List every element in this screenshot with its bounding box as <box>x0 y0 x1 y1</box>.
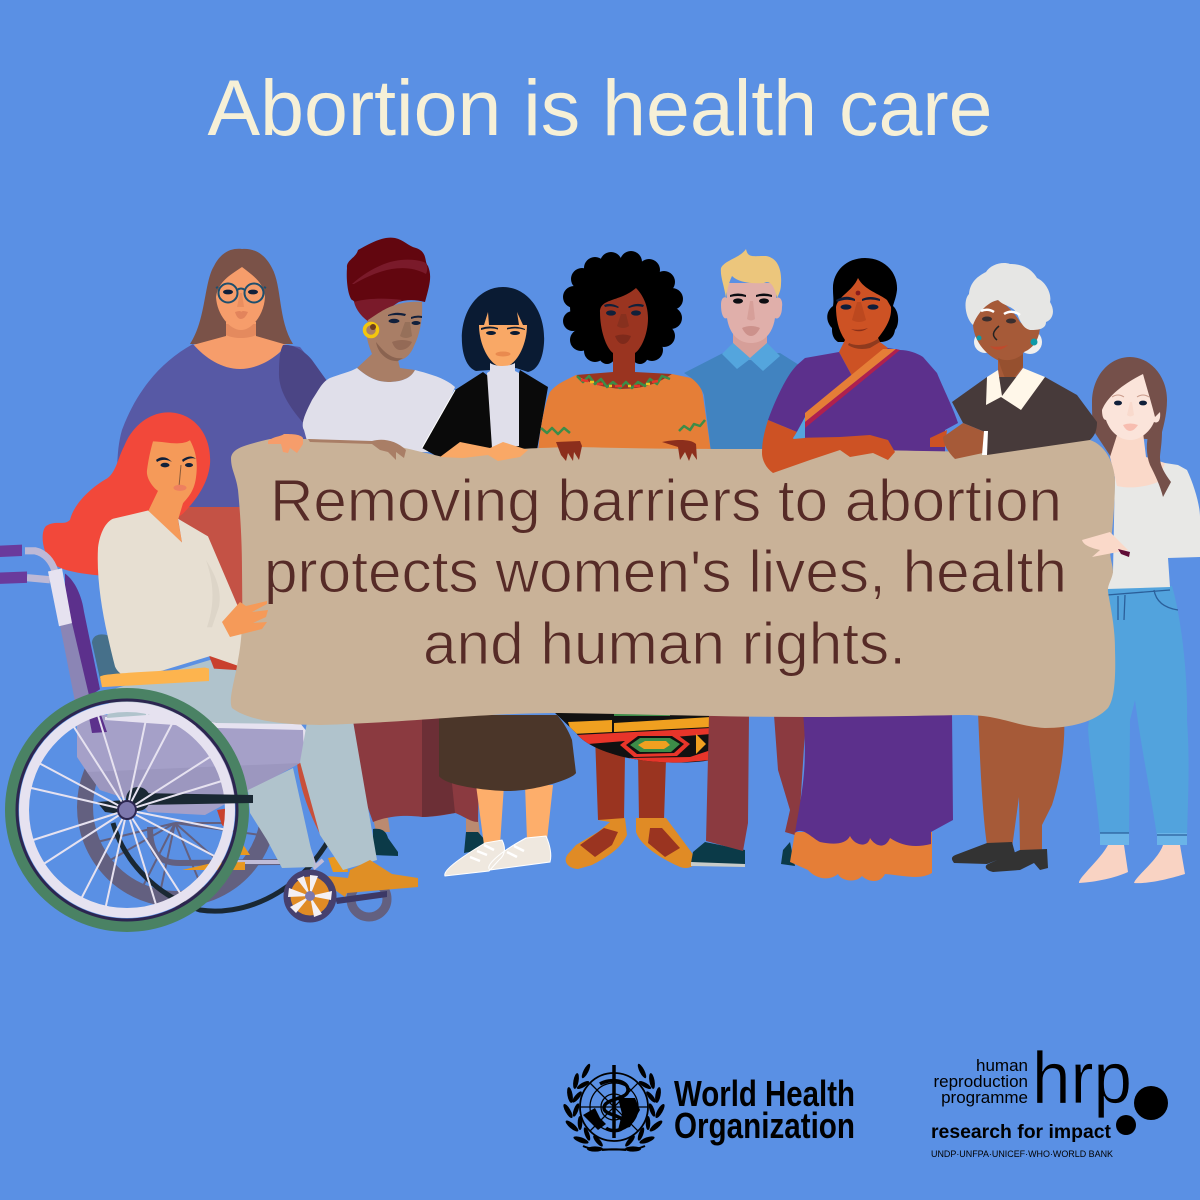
eyebrows and eyes <box>156 457 196 467</box>
person: young woman on the right <box>1079 357 1200 883</box>
blue shirt <box>684 353 799 452</box>
person: woman with glasses, purple sweater <box>117 249 327 617</box>
neck and chest <box>1110 432 1165 487</box>
wheelchair user figure and chair <box>0 412 418 926</box>
earring <box>364 324 378 336</box>
banner text: Removing barriers to abortion <box>270 468 1062 534</box>
lower body: elderly woman's legs and shoes <box>952 712 1064 872</box>
laces <box>470 845 524 861</box>
emblem <box>562 1063 666 1152</box>
brows <box>1112 395 1149 397</box>
laurel right <box>624 1063 666 1152</box>
neck and chest <box>193 322 287 372</box>
bare ankles <box>373 818 480 834</box>
face <box>216 267 265 330</box>
lower body: sari skirt <box>790 712 953 881</box>
face and neck <box>836 278 891 376</box>
logo: World Health Organization: Organization <box>674 1105 855 1146</box>
nose and lips <box>747 301 755 320</box>
arm: sari woman <box>762 420 895 473</box>
title: Abortion is health care <box>208 63 992 152</box>
face with ears <box>721 283 782 343</box>
turtleneck <box>487 363 519 448</box>
lower body: woman with patterned skirt and sandals <box>550 710 715 869</box>
purple sweater <box>117 344 327 515</box>
teal shoes <box>691 842 795 866</box>
thigh <box>107 660 330 724</box>
face and neck <box>147 440 197 543</box>
collar <box>722 343 780 371</box>
bindi <box>856 291 860 295</box>
globe <box>580 1073 648 1141</box>
jacket left edge highlight <box>422 390 455 448</box>
sponsors: UNDP·UNFPA·UNICEF·WHO·WORLD BANK <box>931 1149 1114 1160</box>
purple sari blouse <box>768 348 958 452</box>
person: elderly woman, white curly hair <box>966 263 1053 395</box>
purple lower bar <box>88 712 107 733</box>
dress: elderly woman <box>952 377 1097 455</box>
spokes <box>27 710 227 910</box>
leg front <box>300 715 377 870</box>
person: woman with black bob, black jacket <box>422 287 548 458</box>
red skirt sliver <box>297 760 330 840</box>
leg behind <box>248 768 315 868</box>
skirt <box>351 715 480 822</box>
hub <box>118 801 136 819</box>
eyes and brows <box>481 326 525 335</box>
handle tubes <box>25 551 55 580</box>
logo: World Health Organization <box>562 1063 855 1152</box>
continents <box>583 1098 640 1130</box>
trousers <box>706 715 806 851</box>
banner text: protects women's lives, health <box>264 539 1067 605</box>
rear footplate wheel <box>335 881 387 917</box>
jeans <box>1088 586 1189 845</box>
person: blond man, blue shirt <box>684 249 799 452</box>
programme name: programme <box>941 1088 1028 1107</box>
face <box>1102 374 1160 440</box>
fringe gaps <box>484 312 523 325</box>
neck shadow <box>998 354 1023 385</box>
blouse <box>98 511 245 679</box>
grey strut <box>150 827 282 863</box>
upper body group <box>0 412 245 702</box>
face <box>479 325 527 367</box>
sleeve shading <box>279 345 327 425</box>
arm: bob woman <box>440 442 528 461</box>
lower body: maroon skirt of first woman <box>351 715 492 856</box>
lips <box>990 345 1008 350</box>
neck <box>733 325 767 360</box>
banner text <box>264 468 1067 677</box>
white sneakers <box>445 836 551 876</box>
orange top <box>538 374 711 452</box>
red waist <box>170 507 245 617</box>
person: woman with turban, white shirt <box>303 238 455 452</box>
white curly hair <box>966 263 1053 330</box>
laurel tie <box>583 1146 645 1150</box>
banner text: and human rights. <box>423 611 906 677</box>
bracelet <box>1118 549 1130 557</box>
dark cross bar and hub shadow <box>137 793 253 805</box>
eyes and brows <box>388 313 422 325</box>
eyes and brows <box>836 297 880 310</box>
light footrest bars <box>237 843 323 867</box>
white shirt <box>303 368 455 452</box>
neck <box>998 352 1023 395</box>
eyes and brows <box>730 294 772 304</box>
programme name: reproduction <box>933 1072 1028 1091</box>
hair <box>462 287 544 372</box>
black jacket <box>422 370 548 458</box>
lower body: woman in dark skirt with white sneakers <box>439 715 576 876</box>
hands: afro woman <box>556 440 697 461</box>
hand: elderly woman <box>943 423 985 459</box>
eyes and brows <box>604 304 644 316</box>
seat <box>77 715 308 803</box>
seat band <box>87 763 300 803</box>
main front wheel <box>10 694 253 926</box>
hand: wheelchair woman <box>222 601 268 637</box>
armrest <box>100 668 209 687</box>
white seat edge <box>105 713 308 760</box>
skin: face and neck <box>357 302 422 382</box>
feet <box>1079 845 1185 883</box>
purple drape <box>795 712 953 846</box>
black hair with side buns <box>827 258 898 342</box>
sandals <box>566 818 627 869</box>
back cushion <box>92 634 120 679</box>
patterned kente skirt <box>555 713 709 763</box>
teal shoes <box>373 829 492 856</box>
blouse fold <box>206 560 220 627</box>
hair <box>190 249 293 344</box>
eyes and lips <box>223 290 258 294</box>
afro hair <box>563 251 683 364</box>
person: woman with afro, orange top <box>538 251 711 452</box>
banner <box>231 439 1115 728</box>
person: woman in purple sari, upper body <box>768 258 958 452</box>
frame <box>60 623 90 702</box>
white hair behind ears <box>974 330 1042 354</box>
sari sash <box>805 349 896 422</box>
collar <box>986 368 1045 410</box>
face <box>973 300 1040 362</box>
hrp letters: hrp <box>1032 1038 1132 1119</box>
back wheel of chair <box>85 715 269 899</box>
hands over banner <box>222 368 1130 637</box>
hand: right woman <box>1082 532 1128 557</box>
dots <box>1116 1086 1168 1135</box>
orange foot behind <box>182 843 348 872</box>
blond hair <box>721 249 781 298</box>
programme name: human <box>976 1056 1028 1075</box>
tagline: research for impact <box>931 1122 1112 1143</box>
nose and lips <box>617 314 629 328</box>
dark skirt <box>439 715 576 791</box>
nose and lips <box>852 302 866 322</box>
face and neck <box>576 288 672 389</box>
caster wheel <box>287 873 333 919</box>
eyes and brows <box>982 316 1016 340</box>
braid <box>1147 430 1171 497</box>
nose and lips <box>400 322 412 338</box>
logo: hrp <box>931 1038 1168 1160</box>
hair <box>43 412 210 576</box>
black shoes <box>952 842 1048 872</box>
purple backrest <box>65 574 100 700</box>
lower seat flap <box>140 803 227 815</box>
hand: turban woman <box>308 439 406 460</box>
earring <box>1030 338 1038 346</box>
legs <box>978 712 1064 855</box>
legs <box>595 735 666 820</box>
orange shoe <box>328 860 418 897</box>
embroidery <box>541 376 705 434</box>
curved dark frame <box>113 823 330 911</box>
eyes and lips <box>1114 401 1147 405</box>
staff and serpent <box>612 1065 616 1138</box>
legs <box>476 785 553 845</box>
laurel left <box>562 1063 604 1152</box>
lips <box>496 352 510 356</box>
orange hem <box>790 832 932 881</box>
purple grips <box>0 545 27 584</box>
blue gap <box>793 417 805 439</box>
lower body: man's trousers and shoes <box>691 715 806 867</box>
red skirt under blouse <box>208 648 245 671</box>
turban <box>347 238 430 322</box>
red shoe strap <box>217 808 230 830</box>
programme name <box>933 1056 1028 1107</box>
wordmark: World Health <box>674 1073 855 1114</box>
nose and lips <box>1127 402 1134 416</box>
nose and lips <box>179 465 184 489</box>
hand: glasses woman <box>268 434 303 453</box>
forearm behind elderly woman's hand <box>930 430 947 447</box>
white handle pad <box>48 568 72 626</box>
glasses <box>216 284 266 302</box>
white top <box>1107 463 1200 589</box>
hair <box>1092 357 1167 457</box>
